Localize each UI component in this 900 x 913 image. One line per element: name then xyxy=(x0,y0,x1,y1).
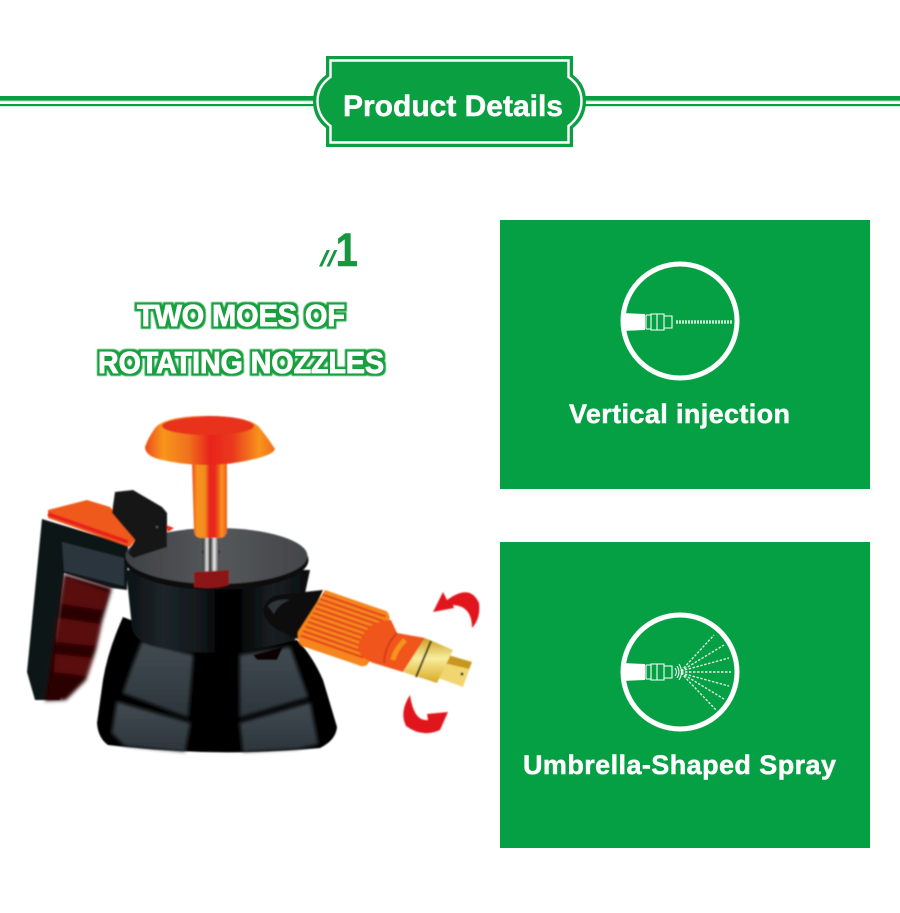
label: vertical injection: Vertical injection xyxy=(569,399,790,429)
arrow: rotate top xyxy=(433,592,479,628)
heading: Product Details: Product Details xyxy=(343,90,563,123)
upper body xyxy=(126,570,310,652)
black block xyxy=(112,490,167,558)
title: two modes of rotating nozzles xyxy=(98,298,384,380)
icon: umbrella spray nozzle xyxy=(622,615,737,729)
section number xyxy=(319,224,358,277)
brass knurl xyxy=(403,638,453,683)
trigger xyxy=(48,500,174,547)
brass tip xyxy=(430,655,472,687)
label: umbrella-shaped spray: Umbrella-Shaped Spray xyxy=(523,750,836,780)
nozzle collar xyxy=(298,590,390,666)
handle xyxy=(27,519,128,701)
header banner xyxy=(0,56,900,147)
product photo: pressure sprayer xyxy=(27,416,479,752)
pump rod xyxy=(194,536,229,588)
pump knob xyxy=(145,416,275,538)
title: two modes of rotating nozzles: TWO MOES OF xyxy=(137,298,345,333)
section number: // xyxy=(319,246,339,271)
title: two modes of rotating nozzles: ROTATING NOZZLES xyxy=(98,345,384,380)
side connector xyxy=(263,590,323,640)
lid xyxy=(124,528,308,590)
side vent slot xyxy=(253,647,283,660)
icon: straight jet nozzle xyxy=(622,264,737,378)
nozzle stem xyxy=(358,620,425,672)
lower body xyxy=(97,617,337,752)
panel: vertical injection xyxy=(500,220,870,489)
section number: 1 xyxy=(336,224,358,277)
panel: umbrella-shaped spray xyxy=(500,542,870,848)
arrow: rotate bottom xyxy=(403,695,448,733)
